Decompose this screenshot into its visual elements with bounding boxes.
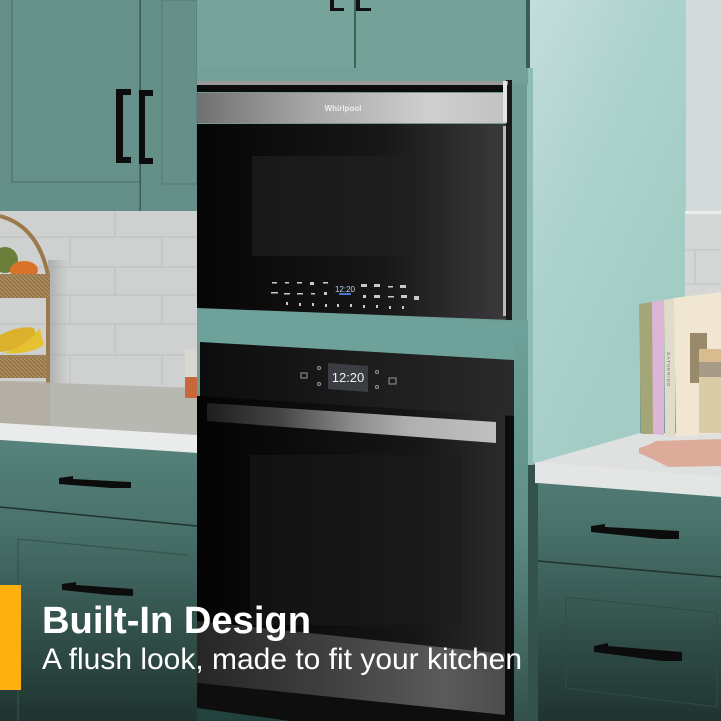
oven body bbox=[197, 396, 506, 721]
drawer handle bbox=[59, 476, 131, 488]
knitted trivet bbox=[639, 439, 721, 467]
fruit basket bbox=[0, 216, 49, 386]
oven buttons bbox=[301, 366, 396, 388]
orange cup bbox=[185, 349, 197, 398]
oven handle bbox=[207, 403, 496, 443]
books bbox=[639, 292, 721, 437]
right wall and tiles bbox=[685, 0, 721, 302]
microwave clock: 12:20 bbox=[335, 285, 356, 294]
microwave door bbox=[197, 124, 512, 320]
microwave bbox=[197, 80, 512, 320]
wall oven bbox=[197, 342, 514, 721]
oven control panel bbox=[200, 342, 514, 416]
drawer handle bbox=[591, 524, 679, 539]
oven display: 12:20 bbox=[332, 370, 364, 385]
upper left cabinet bbox=[0, 0, 197, 212]
books: GATHERING bbox=[666, 352, 671, 387]
lower right cabinets bbox=[538, 483, 721, 721]
center wall between ovens bbox=[197, 68, 538, 721]
microwave top steel panel bbox=[197, 81, 508, 85]
oven bottom reflection bbox=[197, 621, 505, 715]
lower left cabinets bbox=[0, 440, 197, 721]
oven display bbox=[328, 363, 368, 392]
tile backsplash left bbox=[0, 211, 197, 391]
cabinet handles bbox=[116, 89, 153, 164]
upper center cabinets bbox=[197, 0, 530, 71]
caption subtitle: A flush look, made to fit your kitchen bbox=[42, 643, 522, 676]
caption title: Built-In Design bbox=[42, 600, 311, 642]
brand logo: Whirlpool bbox=[325, 104, 361, 113]
yellow accent bar bbox=[0, 585, 21, 690]
right countertop bbox=[535, 433, 721, 497]
left countertop bbox=[0, 381, 197, 453]
microwave controls bbox=[271, 282, 419, 309]
tall side panel bbox=[527, 0, 686, 468]
glass jar bbox=[699, 349, 721, 433]
